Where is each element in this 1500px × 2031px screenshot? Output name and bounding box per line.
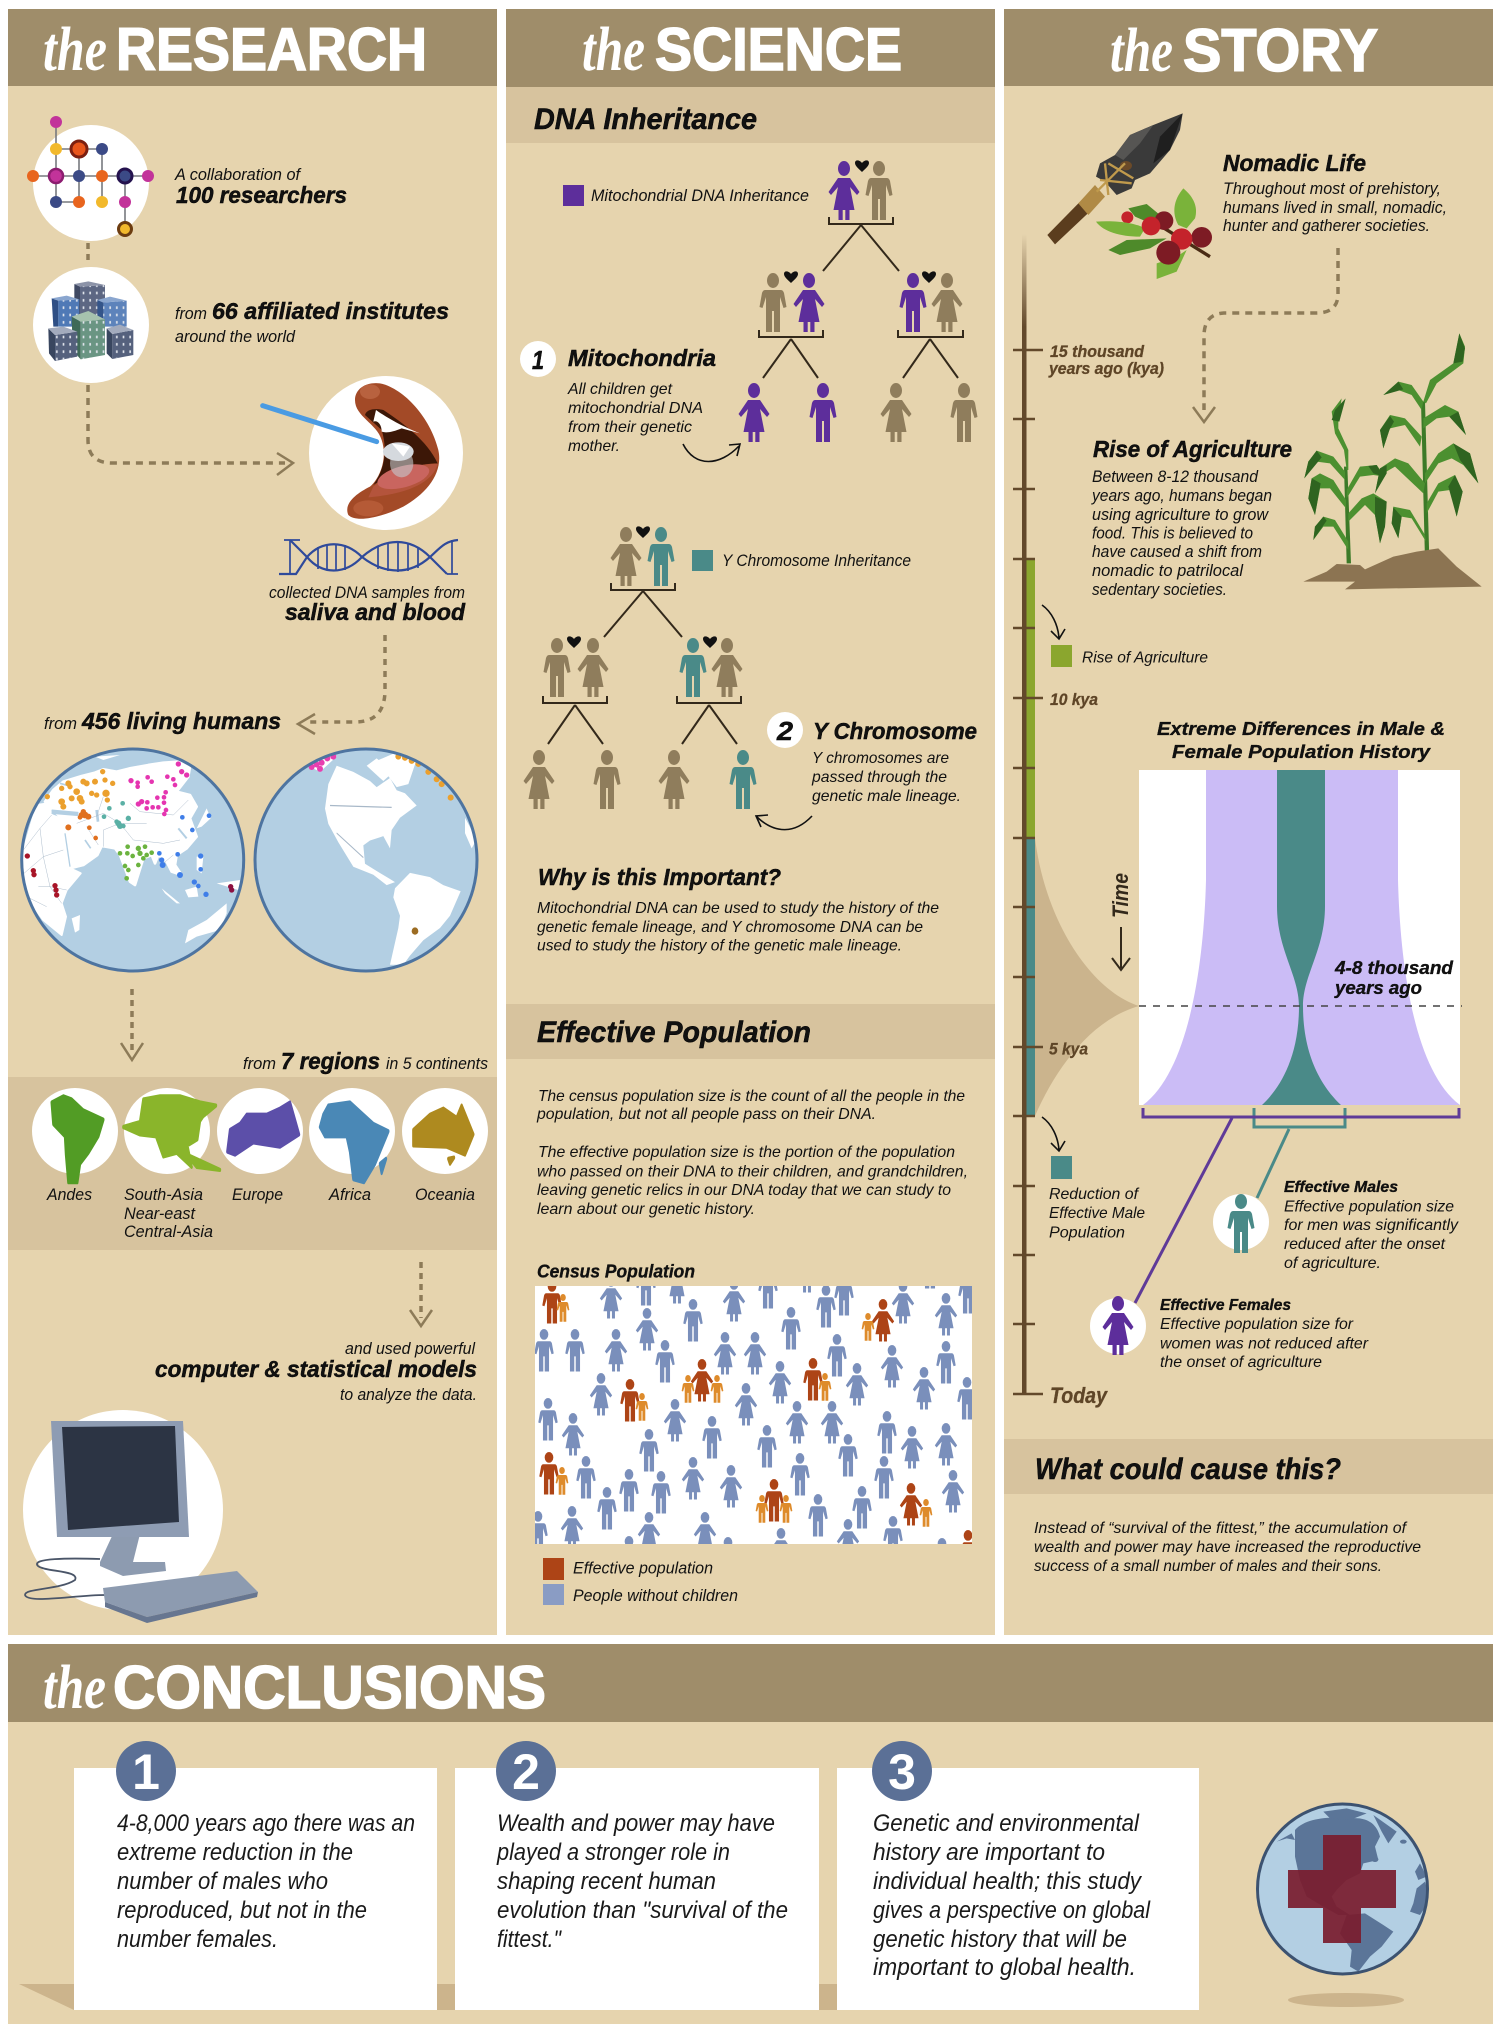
card: conclusion 2: played a stronger role in [496,1839,730,1866]
text: rise of agriculture: have caused a shift from [1092,542,1262,561]
card: conclusion 2: fittest." [497,1926,562,1953]
timeline labels: 10 kya [1050,690,1098,709]
legend: population: Effective population [573,1558,713,1578]
timeline labels: 5 kya [1049,1040,1088,1058]
legend: population [543,1558,738,1605]
ribbon folds [19,1984,837,2010]
text: saliva and blood: collected DNA samples from [269,583,465,602]
icon: DNA helix [279,540,458,574]
text: why is this important: Mitochondrial DNA can be used to study the history of the [537,900,939,917]
icon: Australia [413,1106,473,1164]
callout: 1 mitochondria: from their genetic [568,419,692,436]
legend: reduction of effective males: Effective Male [1049,1205,1145,1222]
heading: the research: the [43,16,107,84]
text: rise of agriculture: food. This is believed to [1092,524,1253,543]
text: rise of agriculture: Rise of Agriculture [1093,436,1292,462]
heading: the research: RESEARCH [116,16,427,83]
text: nomadic life: humans lived in small, nomadic, [1223,198,1447,217]
heading: extreme differences chart: Female Population History [1172,742,1431,762]
legend: population: People without children [573,1586,738,1605]
map: eastern hemisphere with sample dots [22,749,244,971]
icon: spear and berries [1047,113,1212,279]
callout: effective females: women was not reduced after [1160,1336,1369,1352]
card: conclusion 3: Genetic and environmental [873,1810,1140,1837]
callout: 2 Y chromosome: passed through the [811,769,947,786]
heading: the conclusions: CONCLUSIONS [113,1654,546,1721]
panel: the story [1004,9,1493,1635]
heading: the conclusions: the [43,1654,106,1722]
heading: the science [506,9,995,87]
panel: the research [8,9,497,1635]
text: saliva and blood [269,583,466,625]
text: 100 researchers [174,165,347,208]
text: computer and statistical models: to analyze the data. [340,1385,477,1404]
chart: Y chromosome family tree [524,526,756,809]
text: why is this important: genetic female lineage, and Y chromosome DNA can be [537,919,923,936]
icon: corn plants [1303,333,1482,589]
card: conclusion 3: 3 [888,1744,916,1800]
legend: mitochondrial: Mitochondrial DNA Inheritance [591,186,809,205]
text: region labels [46,1185,475,1241]
callout: 1 mitochondria: 1 [532,345,544,375]
card: conclusion 1 [74,1741,437,2010]
text: why is this important: Why is this Important? [538,864,781,890]
text: computer and statistical models: computer & statistical models [155,1356,477,1382]
callout: effective females: Effective Females [1160,1297,1291,1314]
heading: census population: Census Population [537,1262,695,1282]
heading: extreme differences chart: Extreme Differences in Male & [1157,719,1445,739]
text: population definitions: leaving genetic relics in our DNA today that we can study to [537,1182,951,1199]
card: conclusion 3: gives a perspective on global [873,1897,1151,1924]
text: nomadic life: Nomadic Life [1223,150,1366,176]
text: population definitions: The effective population size is the portion of the population [538,1144,955,1161]
callout: 2 Y chromosome: 2 [776,716,794,746]
text: computer and statistical models [155,1339,477,1404]
annotation: 4-8 thousand years ago [1334,958,1454,998]
bracket: effective females [1135,1108,1459,1303]
text: rise of agriculture: Between 8-12 thousand [1092,467,1258,486]
text: cause explanation: Instead of “survival of the fittest,” the accumulation of [1034,1520,1408,1537]
text: population definitions: population, but not all people pass on their DNA. [536,1106,876,1123]
text: 7 regions [243,1048,488,1074]
map: western hemisphere with sample dots [255,749,477,971]
callout: effective females [1090,1296,1369,1371]
text: 66 affiliated institutes: 66 affiliated institutes [212,298,449,324]
text: 7 regions: from [243,1054,276,1073]
icon: computer [23,1410,258,1623]
heading: the conclusions [8,1644,1493,1722]
callout: 2 Y chromosome [767,712,977,805]
text: 66 affiliated institutes [175,298,449,346]
text: 100 researchers: A collaboration of [174,165,302,184]
callout: effective males: Effective Males [1284,1179,1398,1196]
callout: 1 mitochondria: Mitochondria [568,345,716,371]
chart: population bottleneck [1139,770,1462,1105]
text: rise of agriculture: years ago, humans began [1091,486,1272,505]
text: region labels: Europe [232,1185,283,1204]
text: region labels: Africa [328,1185,371,1204]
text: region labels: Oceania [415,1185,475,1204]
callout: effective males: of agriculture. [1284,1255,1381,1272]
text: rise of agriculture: sedentary societies. [1092,580,1227,599]
text: rise of agriculture: using agriculture to grow [1092,505,1270,524]
card: conclusion 2: 2 [512,1744,540,1800]
text: nomadic life: Throughout most of prehistory, [1223,179,1441,198]
text: region labels: Near-east [124,1204,196,1223]
chart: census population pictogram [535,1286,972,1544]
callout: effective females: the onset of agriculture [1160,1354,1322,1371]
arrow: regions to models [410,1262,432,1326]
card: conclusion 1: 1 [132,1744,160,1800]
icon: researcher network [27,116,154,241]
shape: bottleneck funnel [1035,838,1139,1116]
arrow: time: Time [1108,873,1133,918]
arrow: institutes to saliva sample [88,385,293,475]
legend: reduction of effective males: Reduction of [1049,1186,1140,1203]
chart: mitochondrial family tree [738,160,978,442]
text: population definitions: learn about our genetic history. [537,1201,755,1218]
card: conclusion 1: 4-8,000 years ago there was an [117,1810,415,1837]
arrow: time [1108,873,1133,970]
arrow: to daughter [683,444,740,462]
legend: rise of agriculture [1042,605,1208,667]
card: conclusion 2: evolution than "survival of the [497,1897,788,1924]
callout: 2 Y chromosome: Y chromosomes are [812,750,949,767]
callout: effective females: Effective population size for [1160,1316,1354,1333]
text: 456 living humans: 456 living humans [81,708,281,734]
heading: the story [1004,9,1493,86]
text: region labels: Central-Asia [124,1222,213,1241]
heading: extreme differences chart [1157,719,1445,762]
heading: the story: STORY [1183,17,1378,84]
heading: DNA inheritance [506,87,995,143]
annotation: 4-8 thousand years ago: years ago [1334,978,1422,998]
callout: 1 mitochondria [520,341,716,455]
text: cause explanation: success of a small number of males and their sons. [1034,1558,1382,1575]
callout: effective males: reduced after the onset [1284,1236,1446,1253]
panel: the science [506,9,995,1635]
card: conclusion 3: individual health; this study [873,1868,1143,1895]
arrow: humans to regions [121,989,143,1060]
card: conclusion 1: number of males who [117,1868,328,1895]
arrow: network to institutes [86,243,90,264]
text: 100 researchers: 100 researchers [176,182,347,208]
icon: mouth with swab [263,376,463,530]
text: rise of agriculture: nomadic to patrilocal [1092,561,1244,580]
text: saliva and blood: saliva and blood [285,599,466,625]
heading: what could cause this: What could cause this? [1035,1453,1341,1486]
heading: effective population: Effective Population [537,1016,811,1049]
panel: the conclusions [8,1644,1493,2024]
timeline labels: Today [1050,1383,1109,1408]
timeline labels: 15 thousand [1050,342,1145,361]
callout: 2 Y chromosome: Y Chromosome [813,718,977,744]
icon: institute buildings [33,267,149,383]
text: why is this important: used to study the history of the genetic male lineage. [537,938,902,954]
text: nomadic life [1223,150,1447,235]
text: population definitions: who passed on their DNA to their children, and grandchildren, [537,1164,968,1180]
callout: effective males: Effective population size [1284,1198,1454,1216]
icon: Asia [123,1096,220,1170]
text: nomadic life: hunter and gatherer societies. [1223,216,1430,235]
text: computer and statistical models: and used powerful [345,1339,476,1358]
card: conclusion 1: reproduced, but not in the [117,1897,367,1924]
callout: 2 Y chromosome: genetic male lineage. [812,788,961,805]
chart: timeline [1013,234,1164,1408]
card: conclusion 3 [837,1741,1199,2010]
arrow: nomadic life to agriculture [1193,248,1338,422]
card: conclusion 3: important to global health. [873,1954,1136,1981]
heading: what could cause this [1004,1439,1493,1494]
text: why is this important [537,864,939,954]
callout: effective males [1213,1179,1459,1272]
callout: effective males: for men was significantly [1284,1217,1459,1234]
text: 66 affiliated institutes: around the world [175,327,296,346]
bracket: effective males [1254,1108,1345,1198]
legend: reduction of effective males [1042,1117,1145,1242]
heading: the research [8,9,497,86]
text: rise of agriculture [1091,436,1292,599]
heading: DNA inheritance: DNA Inheritance [534,103,757,136]
callout: 1 mitochondria: mitochondrial DNA [568,400,703,417]
text: 456 living humans: from [44,714,77,733]
annotation: 4-8 thousand years ago: 4-8 thousand [1334,958,1454,978]
text: population definitions: The census population size is the count of all the people in the [538,1088,965,1105]
icon: Europe [227,1103,299,1155]
legend: rise of agriculture: Rise of Agriculture [1082,650,1208,666]
text: cause explanation: wealth and power may have increased the reproductive [1034,1539,1421,1556]
arrow: to male descendant [756,815,812,830]
timeline labels: years ago (kya) [1048,359,1164,378]
card: conclusion 2 [455,1741,819,2010]
legend: Y chromosome: Y Chromosome Inheritance [722,551,911,570]
text: cause explanation [1034,1520,1421,1575]
icon: Africa [320,1103,388,1182]
text: region labels: Andes [46,1185,92,1204]
card: conclusion 3: genetic history that will be [873,1926,1127,1953]
text: 7 regions: 7 regions [281,1048,380,1074]
timeline labels [1048,342,1164,1408]
card: conclusion 2: shaping recent human [497,1868,716,1895]
text: 7 regions: in 5 continents [386,1054,488,1073]
heading: the science: the [582,16,645,84]
icon: South America [52,1096,103,1182]
arrow: saliva to living humans [298,635,385,734]
callout: 1 mitochondria: mother. [568,438,620,455]
icon: globe with red cross [1258,1804,1430,2007]
panel: regions band [8,1077,497,1250]
card: conclusion 3: history are important to [873,1839,1105,1866]
callout: 1 mitochondria: All children get [567,381,673,398]
heading: the science: SCIENCE [655,16,902,83]
legend: reduction of effective males: Population [1049,1224,1125,1242]
text: 66 affiliated institutes: from [175,304,207,323]
heading: the story: the [1110,17,1173,85]
heading: effective population [506,1004,995,1059]
card: conclusion 1: number females. [117,1926,278,1953]
card: conclusion 1: extreme reduction in the [117,1839,353,1866]
text: region labels: South-Asia [124,1185,203,1204]
text: population definitions [536,1088,968,1218]
card: conclusion 2: Wealth and power may have [497,1810,775,1837]
